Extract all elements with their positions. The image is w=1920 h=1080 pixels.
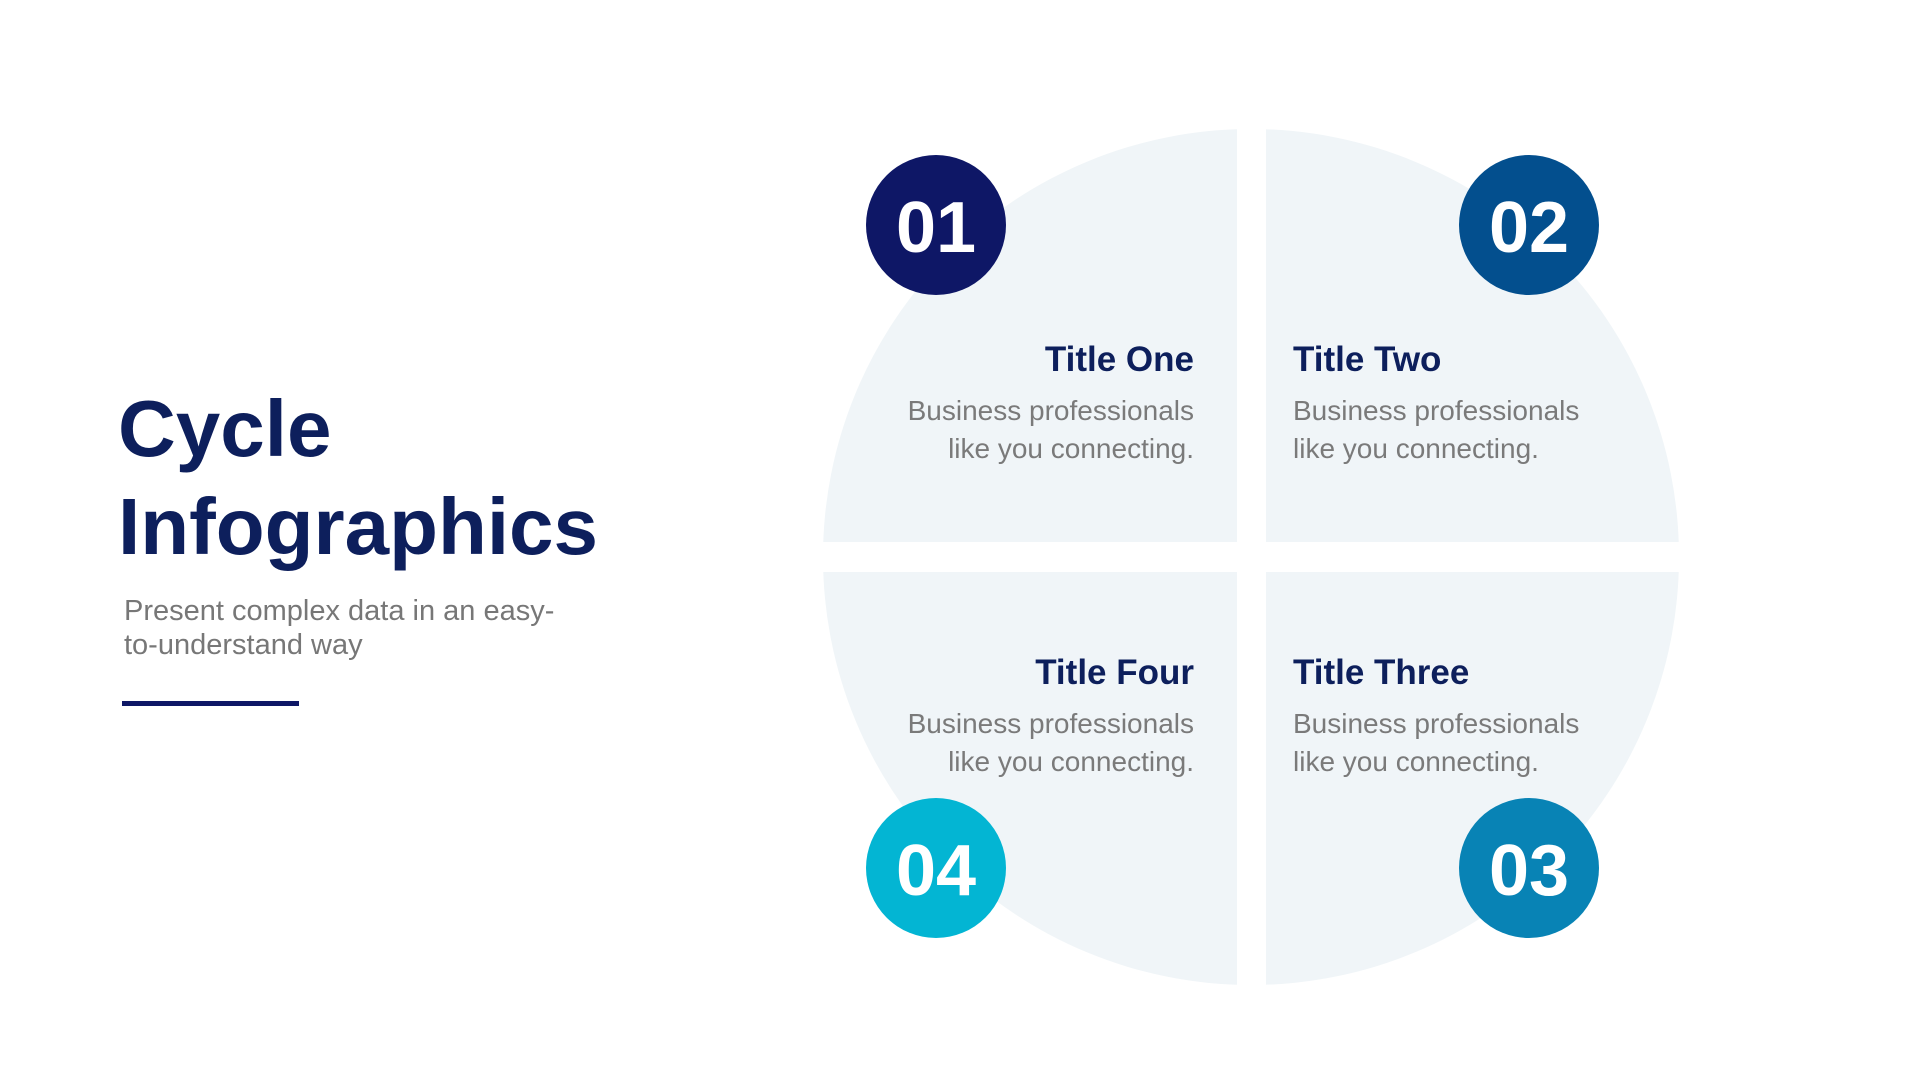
badge 03: 03	[1489, 831, 1569, 911]
badge 02: 02	[1489, 188, 1569, 268]
text: Title Four: like you connecting.	[948, 746, 1194, 777]
badge 01	[866, 155, 1006, 295]
text: Title One	[908, 340, 1194, 464]
text: Title Three: like you connecting.	[1293, 746, 1539, 777]
badge 04: 04	[896, 831, 976, 911]
subtitle: Present complex data in an easy-	[124, 595, 554, 627]
text: Title Three	[1293, 653, 1579, 777]
heading: Cycle	[118, 384, 331, 473]
text: Title Four: Title Four	[1035, 653, 1194, 692]
badge 01: 01	[896, 188, 976, 268]
badge 04	[866, 798, 1006, 938]
text: Title One: Business professionals	[908, 395, 1194, 426]
subtitle	[124, 595, 554, 661]
text: Title One: like you connecting.	[948, 433, 1194, 464]
text: Title Four: Business professionals	[908, 708, 1194, 739]
text: Title One: Title One	[1045, 340, 1194, 379]
underline	[122, 701, 299, 706]
text: Title Two	[1293, 340, 1579, 464]
text: Title Two: like you connecting.	[1293, 433, 1539, 464]
badge 03	[1459, 798, 1599, 938]
text: Title Three: Business professionals	[1293, 708, 1579, 739]
heading: Infographics	[118, 482, 598, 571]
text: Title Two: Title Two	[1293, 340, 1441, 379]
quadrant disc	[800, 100, 1700, 1000]
badge 02	[1459, 155, 1599, 295]
text: Title Two: Business professionals	[1293, 395, 1579, 426]
subtitle: to-understand way	[124, 629, 363, 661]
text: Title Three: Title Three	[1293, 653, 1469, 692]
heading	[118, 384, 598, 571]
text: Title Four	[908, 653, 1194, 777]
